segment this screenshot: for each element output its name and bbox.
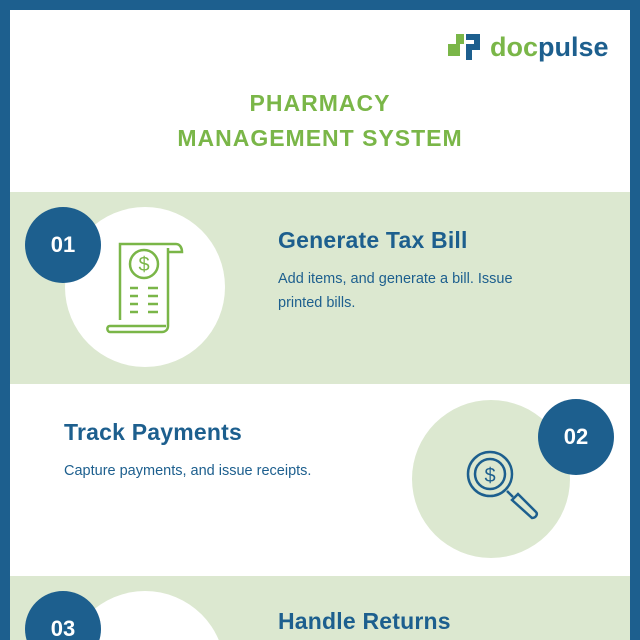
text: printed bills. [278, 295, 355, 311]
badge 01 [25, 207, 101, 283]
title: MANAGEMENT SYSTEM [177, 125, 463, 151]
text [278, 271, 513, 311]
panel: track payments [64, 399, 614, 558]
icon circle [65, 591, 225, 640]
badge 02 [538, 399, 614, 475]
icon: magnifier: $ [484, 465, 496, 487]
badge 01: 01 [51, 232, 75, 257]
badge 03 [25, 591, 101, 640]
text: Capture payments, and issue receipts. [64, 463, 311, 479]
title: PHARMACY [250, 90, 390, 116]
icon circle [412, 400, 570, 558]
text: Add items, and generate a bill. Issue [278, 271, 513, 287]
panel: handle returns [10, 576, 630, 640]
title [177, 90, 463, 151]
heading: Generate Tax Bill [278, 227, 468, 253]
icon: magnifier [466, 450, 538, 520]
icon: bill [106, 242, 184, 334]
icon: bill: $ [138, 254, 150, 276]
heading: Track Payments [64, 419, 242, 445]
logo: docpulse [490, 32, 609, 62]
panel: generate tax bill [10, 192, 630, 384]
icon circle [65, 207, 225, 367]
heading: Handle Returns [278, 608, 451, 634]
badge 02: 02 [564, 424, 588, 449]
